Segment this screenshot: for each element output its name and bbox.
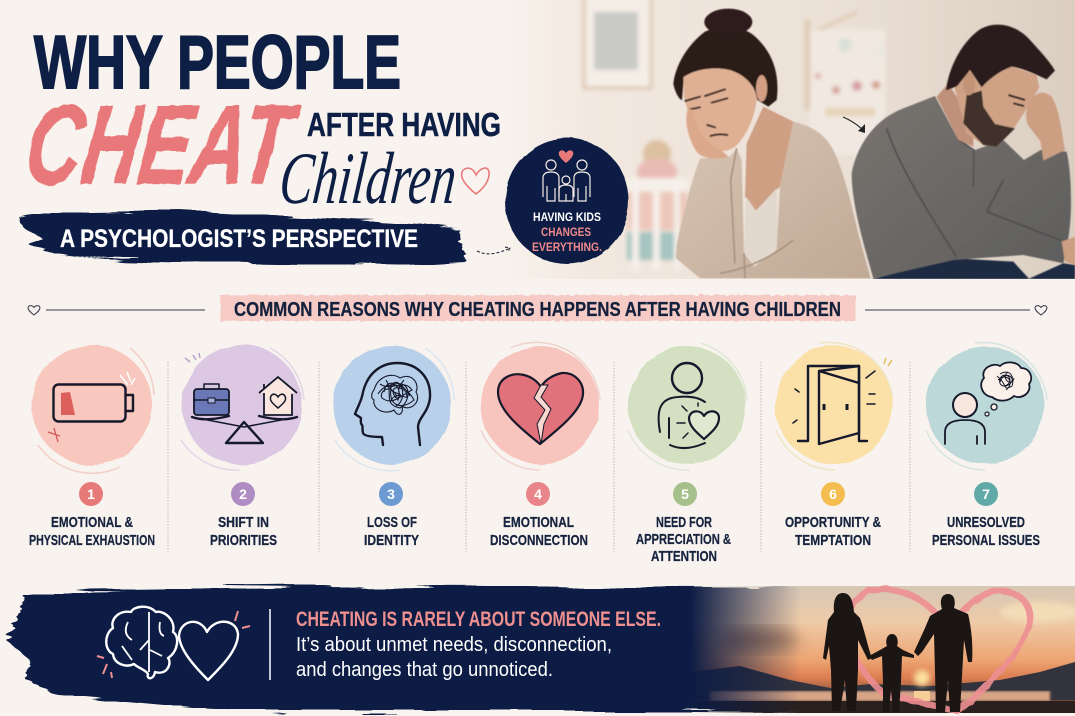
callout circle: having kids changes everything: [505, 138, 629, 264]
label: LOSS OF: [367, 514, 417, 531]
number badge: [231, 482, 255, 506]
label: [636, 514, 731, 565]
panel 3: loss of identity: 3: [387, 486, 395, 502]
label: NEED FOR: [656, 514, 712, 531]
family silhouettes: [823, 593, 972, 712]
man jeans: [872, 258, 1075, 279]
nursery background: [584, 0, 886, 270]
panel 4: emotional disconnection: 4: [534, 486, 542, 502]
icon: low battery: [48, 372, 135, 442]
woman cardigan: [676, 122, 871, 278]
panel 7: unresolved personal issues: 7: [982, 486, 990, 502]
panel 3: loss of identity: [333, 346, 454, 549]
mother: [823, 593, 872, 711]
icon: head with tangled thoughts: [355, 363, 430, 445]
label: [785, 514, 881, 549]
number badge: [379, 482, 403, 506]
man hair: [946, 25, 1055, 91]
panel 5: need for appreciation and attention: 5: [681, 486, 689, 502]
title line: why people: WHY PEOPLE: [34, 20, 401, 104]
panel 6: opportunity and temptation: [775, 342, 893, 549]
label: SHIFT IN: [218, 514, 269, 531]
dashed arrow to circle: [477, 247, 510, 254]
left ornament: [28, 306, 205, 315]
section heading: [28, 295, 1047, 321]
panel 5: need for appreciation and attention: [628, 343, 747, 565]
man brow and eye: [1008, 95, 1025, 106]
vertical divider line: [269, 609, 271, 680]
hero photo: couple sitting back to back in a nursery: [500, 0, 1075, 279]
label: OPPORTUNITY &: [785, 514, 881, 531]
label: EMOTIONAL: [503, 514, 574, 531]
bottom banner: [6, 586, 1075, 713]
watercolour circle: [481, 346, 599, 464]
sunset family photo: [690, 586, 1075, 713]
icon: person with tangled thought bubble: [945, 362, 1031, 444]
pink painted heart: [847, 589, 1030, 711]
man beard: [963, 91, 1015, 147]
label: EMOTIONAL &: [51, 514, 133, 531]
brush stroke: [20, 210, 465, 266]
man sweater: [852, 96, 1071, 278]
clouds and hills: [690, 602, 1075, 713]
label: TEMPTATION: [795, 532, 871, 549]
banner body text: [296, 634, 612, 681]
label: [932, 514, 1040, 549]
panel 4: emotional disconnection: [481, 342, 600, 549]
father: [914, 594, 972, 712]
title word: children: Children: [276, 138, 460, 220]
subtitle brush banner: [20, 210, 465, 266]
watercolour circle: [926, 346, 1044, 464]
navy circle: [505, 138, 629, 264]
number badge: [673, 482, 697, 506]
icon: brain and heart: [97, 607, 250, 680]
title: [19, 20, 501, 220]
title line: after having: AFTER HAVING: [307, 106, 501, 143]
woman: [673, 9, 871, 278]
label: DISCONNECTION: [490, 532, 588, 549]
woman face: [683, 68, 757, 151]
number badge: [526, 482, 550, 506]
label: [29, 514, 155, 549]
icon: broken heart: [498, 373, 583, 444]
label: PRIORITIES: [210, 532, 277, 549]
banner body text: and changes that go unnoticed.: [296, 659, 553, 681]
man face: [954, 66, 1040, 146]
man lower hand: [1062, 237, 1075, 265]
woman hand: [686, 108, 728, 159]
heading text: COMMON REASONS WHY CHEATING HAPPENS AFTER HAVING CHILDREN: [234, 299, 841, 321]
label: PHYSICAL EXHAUSTION: [29, 532, 155, 549]
woman hair back and bun: [673, 27, 777, 107]
watercolour circle: [182, 345, 302, 465]
callout circle: having kids changes everything: CHANGES: [541, 225, 591, 239]
banner body text: It’s about unmet needs, disconnection,: [296, 634, 612, 656]
panel 1: emotional and physical exhaustion: 1: [87, 486, 95, 502]
panel 2: shift in priorities: [181, 345, 304, 549]
icon: open door: [793, 366, 875, 444]
pink brush band: [220, 295, 856, 321]
panel 1: emotional and physical exhaustion: [29, 345, 155, 549]
man hand on temple: [1026, 93, 1065, 161]
watercolour circle: [333, 346, 451, 464]
navy brush background: [6, 586, 820, 711]
callout circle: having kids changes everything: EVERYTHING.: [532, 240, 602, 254]
label: APPRECIATION &: [636, 531, 731, 548]
callout text: HAVING KIDS: [533, 210, 601, 224]
watercolour circle: [775, 346, 893, 464]
label: IDENTITY: [364, 532, 419, 549]
icon: balance scale with briefcase and house: [192, 377, 297, 443]
woman neck and chest: [745, 107, 793, 213]
panel 6: opportunity and temptation: 6: [829, 486, 837, 502]
icon: outline heart: [462, 168, 489, 194]
panel 2: shift in priorities: 2: [239, 486, 247, 502]
man: [852, 25, 1075, 279]
title word: cheat: CHEAT: [19, 81, 305, 207]
dividers: [168, 362, 910, 552]
label: [490, 514, 588, 549]
label: UNRESOLVED: [947, 514, 1025, 531]
subtitle text: A PSYCHOLOGIST’S PERSPECTIVE: [60, 225, 418, 253]
label: ATTENTION: [651, 548, 717, 565]
watercolour circle: [32, 345, 152, 465]
right ornament: [865, 306, 1047, 315]
label: [210, 514, 277, 549]
label: [364, 514, 419, 549]
small arrow between the couple: [843, 117, 865, 133]
number badge: [974, 482, 998, 506]
icon: family with heart: [543, 160, 590, 201]
banner headline: CHEATING IS RARELY ABOUT SOMEONE ELSE.: [296, 608, 661, 631]
number badge: [821, 482, 845, 506]
panel 7: unresolved personal issues: [926, 342, 1047, 549]
woman white top: [744, 188, 778, 265]
child: [869, 634, 914, 712]
man neck: [937, 83, 973, 147]
icon: person holding heart: [659, 363, 719, 448]
woman eyes, brows, mouth: [685, 89, 727, 136]
label: PERSONAL ISSUES: [932, 532, 1040, 549]
number badge: [79, 482, 103, 506]
watercolour circle: [628, 346, 746, 464]
